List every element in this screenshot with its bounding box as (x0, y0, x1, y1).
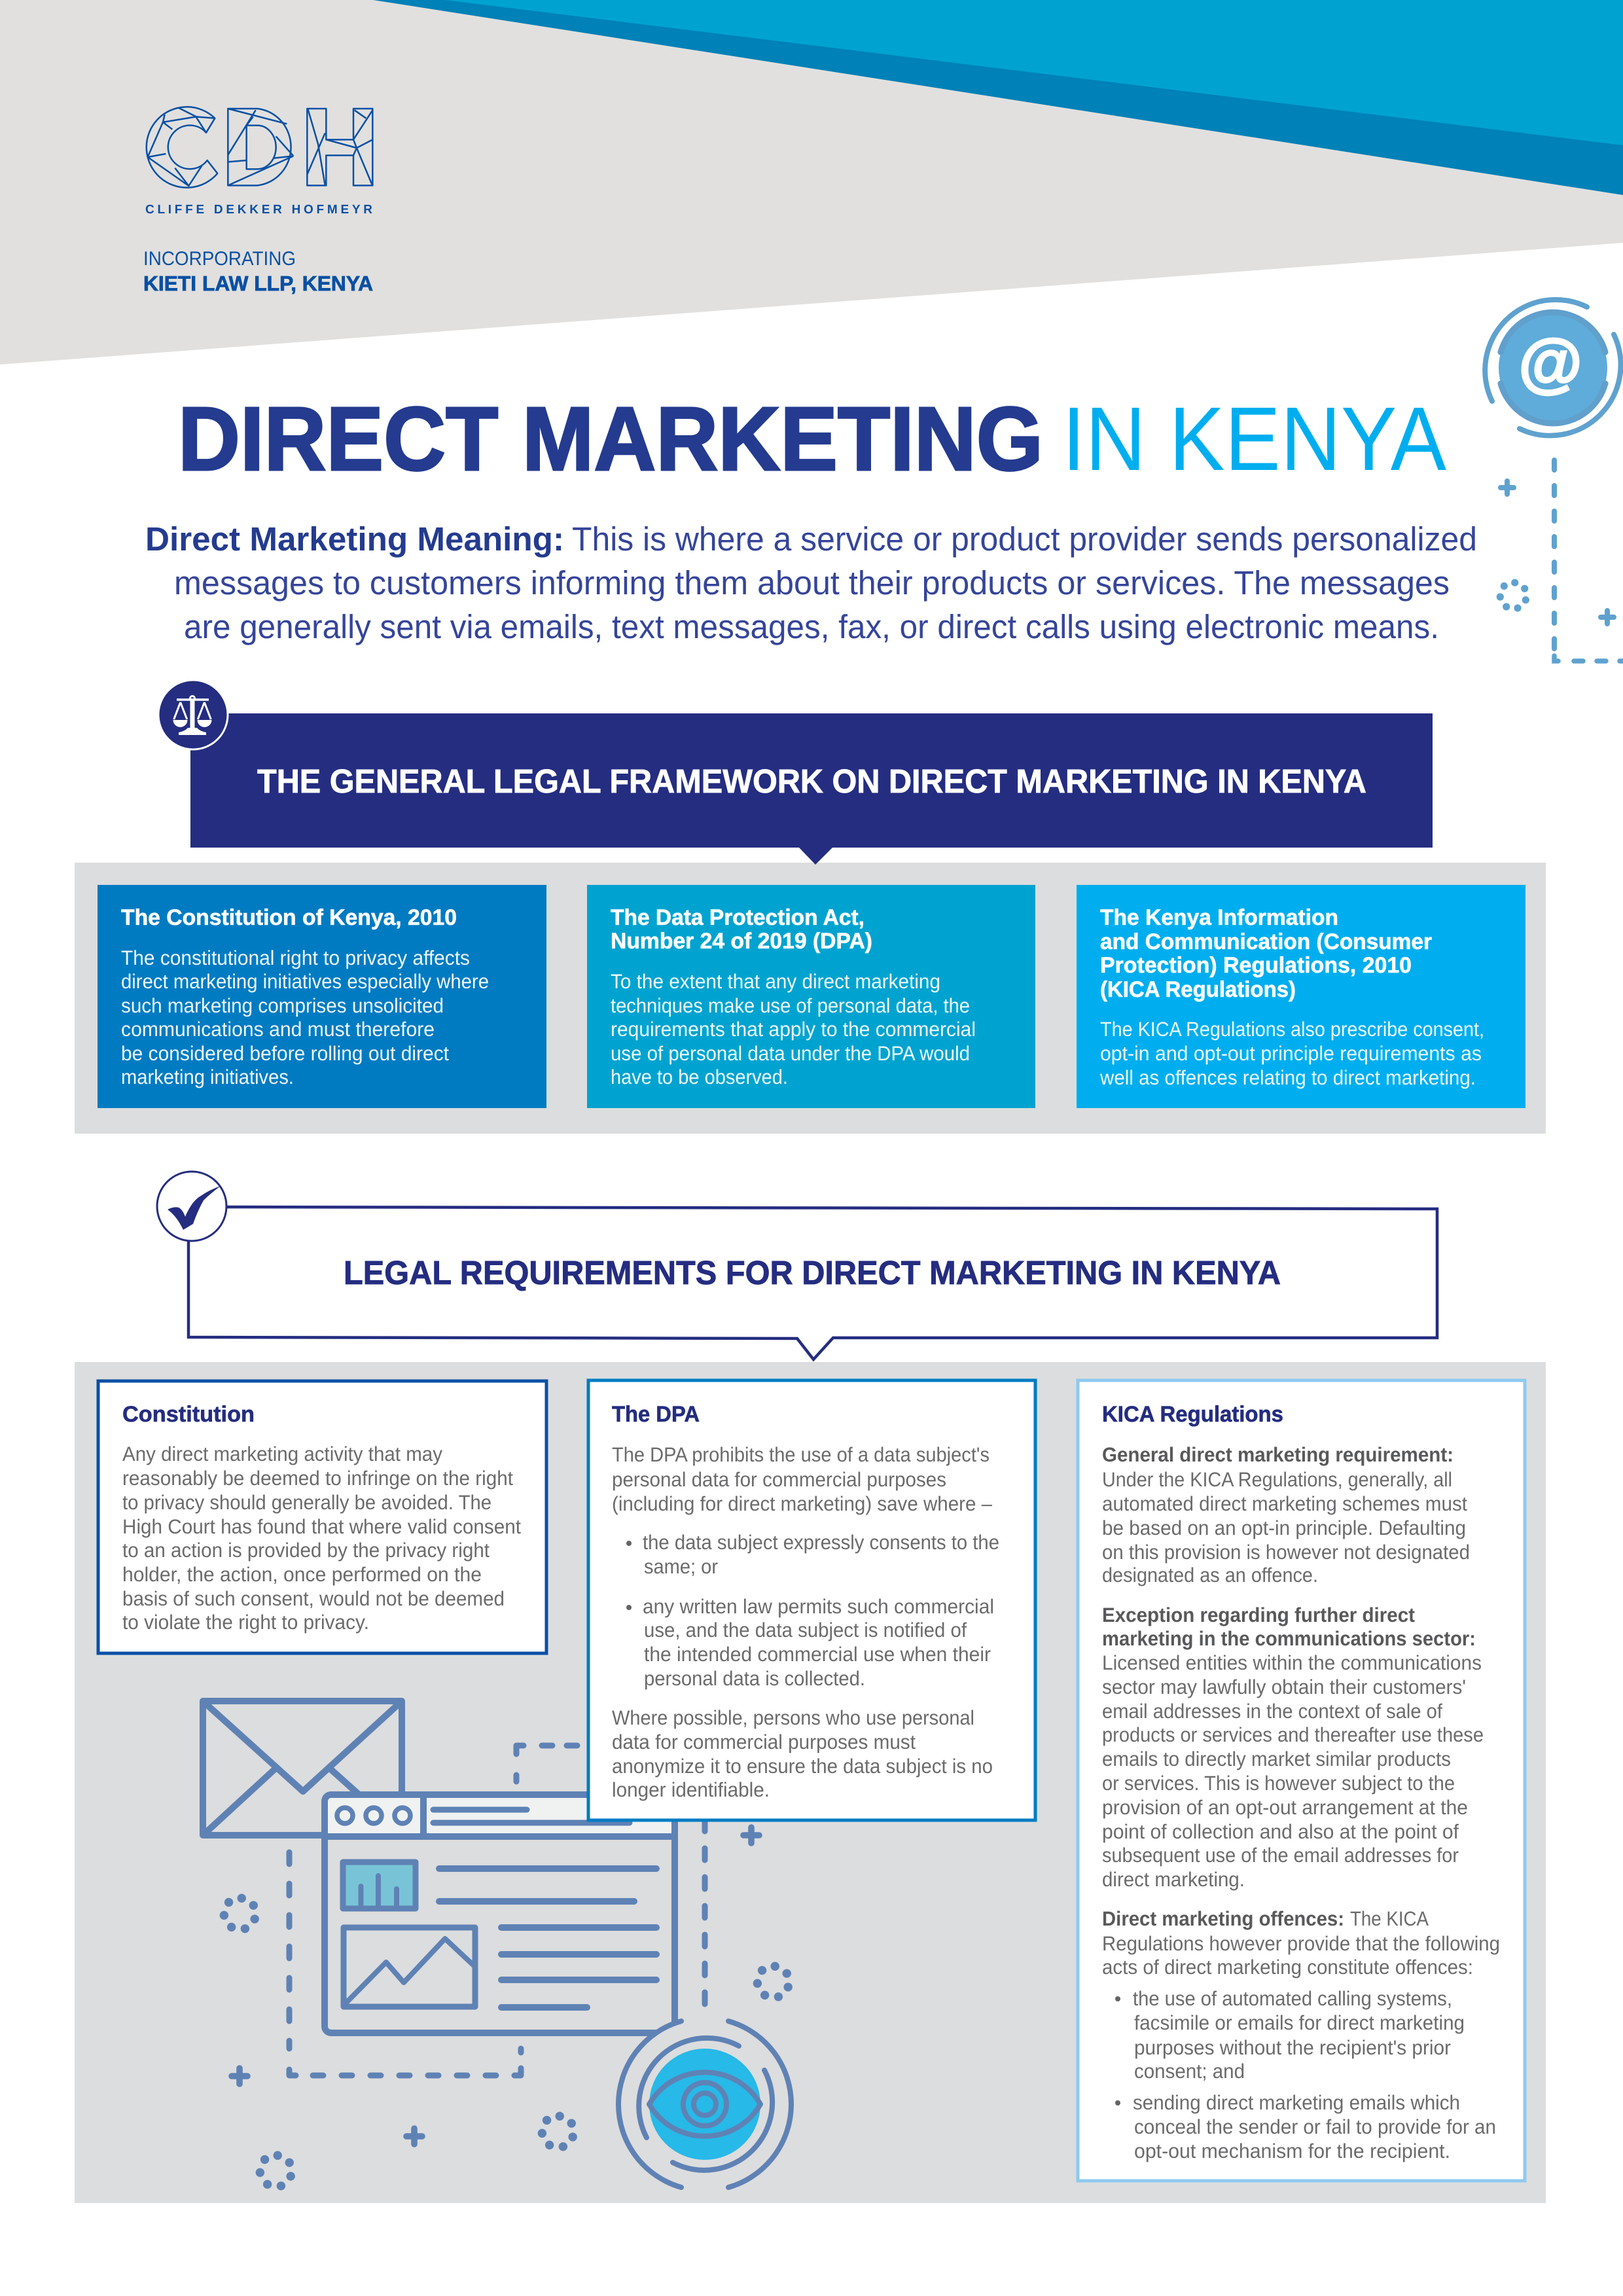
box: KICA Regulations requirement: opt-out mechanism for the recipient. (1134, 2140, 1450, 2162)
illustration: envelope, browser window, eye (203, 1701, 793, 2192)
heading banner: legal requirements: LEGAL REQUIREMENTS FOR DIRECT MARKETING IN KENYA (344, 1254, 1281, 1291)
heading banner: general legal framework: THE GENERAL LEGAL FRAMEWORK ON DIRECT MARKETING IN KENYA (257, 762, 1366, 800)
box: Constitution requirement (98, 1381, 546, 1653)
box: DPA requirement: The DPA (612, 1402, 700, 1427)
envelope (203, 1701, 402, 1835)
title: DIRECT MARKETING (178, 389, 1043, 490)
box: KICA Regulations requirement: consent; and (1134, 2060, 1245, 2083)
heading banner: legal requirements (188, 1207, 1437, 1359)
card: Data Protection Act: To the extent that any direct marketing (611, 970, 940, 993)
icon: at sign in rings with dashed connector (1485, 300, 1623, 661)
card: Constitution of Kenya: marketing initiatives. (121, 1066, 294, 1088)
box: DPA requirement: same; or (644, 1555, 718, 1578)
icon: check mark in circle (157, 1172, 226, 1241)
box: KICA Regulations requirement: Exception regarding further direct (1102, 1604, 1415, 1626)
box: Constitution requirement: reasonably be deemed to infringe on the right (122, 1467, 513, 1490)
box: KICA Regulations requirement: products or services and thereafter use these (1102, 1723, 1484, 1746)
box: KICA Regulations requirement: subsequent use of the email addresses for (1102, 1844, 1459, 1867)
browser window (325, 1795, 675, 2033)
box: DPA requirement: any written law permits such commercial (643, 1595, 994, 1618)
card: Data Protection Act: have to be observed. (611, 1066, 788, 1088)
panel: general framework background (75, 863, 1546, 1134)
card: Constitution of Kenya: direct marketing initiatives especially where (121, 970, 489, 993)
intro text block: messages to customers informing them about their products or services. The messages (174, 564, 1450, 601)
title: IN KENYA (1062, 389, 1446, 490)
box: Constitution requirement: to privacy should generally be avoided. The (122, 1491, 491, 1514)
card: KICA Regulations summary: (KICA Regulations) (1100, 977, 1296, 1002)
box: KICA Regulations requirement: conceal the sender or fail to provide for an (1134, 2115, 1496, 2138)
box: KICA Regulations requirement: automated direct marketing schemes must (1102, 1492, 1467, 1515)
box: KICA Regulations requirement: facsimile or emails for direct marketing (1134, 2011, 1465, 2034)
box: DPA requirement: Where possible, persons who use personal (612, 1706, 974, 1729)
card: KICA Regulations summary: The KICA Regulations also prescribe consent, (1100, 1018, 1484, 1041)
box: Constitution requirement: Constitution (122, 1402, 255, 1427)
header accent: teal band (445, 0, 1623, 145)
box: KICA Regulations requirement: acts of direct marketing constitute offences: (1102, 1956, 1473, 1979)
box: KICA Regulations requirement: marketing in the communications sector: (1102, 1627, 1476, 1650)
intro text block (145, 520, 1477, 645)
card: Data Protection Act: requirements that apply to the commercial (611, 1018, 976, 1041)
box: Constitution requirement: High Court has found that where valid consent (122, 1515, 521, 1538)
card: Constitution of Kenya: be considered before rolling out direct (121, 1042, 449, 1065)
card: KICA Regulations summary: opt-in and opt-out principle requirements as (1100, 1042, 1482, 1065)
box: KICA Regulations requirement: or services. This is however subject to the (1102, 1772, 1455, 1795)
box: KICA Regulations requirement: sending direct marketing emails which (1133, 2091, 1460, 2114)
box: Constitution requirement: to violate the right to privacy. (122, 1611, 369, 1634)
logo mark: faceted CDH letters (147, 107, 372, 188)
box: KICA Regulations requirement: KICA Regulations (1102, 1402, 1283, 1427)
box: DPA requirement: anonymize it to ensure the data subject is no (612, 1755, 993, 1778)
card: Data Protection Act: Number 24 of 2019 (DPA) (611, 929, 872, 954)
box: KICA Regulations requirement: point of collection and also at the point of (1102, 1820, 1459, 1843)
box: Constitution requirement: basis of such consent, would not be deemed (122, 1587, 505, 1610)
intro text block: This is where a service or product provider sends personalized (572, 520, 1477, 558)
card: Constitution of Kenya: communications and must therefore (121, 1018, 435, 1041)
box: KICA Regulations requirement: purposes without the recipient's prior (1134, 2036, 1451, 2059)
logo: CDH Cliffe Dekker Hofmeyr (143, 107, 373, 295)
logo: Kieti Law line: KIETI LAW LLP, KENYA (143, 272, 373, 295)
card: Data Protection Act: use of personal data under the DPA would (611, 1042, 970, 1065)
dashed connectors (289, 1746, 705, 2075)
header background: grey wedge (0, 0, 1623, 365)
box: KICA Regulations requirement: Direct marketing offences: (1102, 1907, 1344, 1930)
box: DPA requirement: personal data for commercial purposes (612, 1468, 946, 1491)
card: Data Protection Act (587, 885, 1035, 1108)
heading banner: general legal framework (190, 713, 1433, 865)
box: KICA Regulations requirement: designated as an offence. (1102, 1564, 1318, 1587)
box: DPA requirement: the data subject expressly consents to the (643, 1531, 999, 1554)
box: KICA Regulations requirement: direct marketing. (1102, 1868, 1245, 1891)
logo: incorporating line: INCORPORATING (143, 248, 296, 270)
box: DPA requirement: data for commercial purposes must (612, 1731, 916, 1753)
box: KICA Regulations requirement: General direct marketing requirement: (1102, 1443, 1454, 1466)
box: KICA Regulations requirement: be based on an opt-in principle. Defaulting (1102, 1516, 1466, 1539)
box: Constitution requirement: to an action is provided by the privacy right (122, 1539, 490, 1562)
card: Constitution of Kenya: The constitutional right to privacy affects (121, 946, 470, 969)
box: KICA Regulations requirement: provision of an opt-out arrangement at the (1102, 1796, 1468, 1819)
box: KICA Regulations requirement: on this provision is however not designated (1102, 1541, 1470, 1564)
logo wordmark: CLIFFE DEKKER HOFMEYR (145, 203, 372, 217)
intro text block: are generally sent via emails, text messages, fax, or direct calls using electronic means. (184, 608, 1439, 645)
box: KICA Regulations requirement: Under the KICA Regulations, generally, all (1102, 1468, 1452, 1491)
card: Constitution of Kenya (98, 885, 546, 1108)
box: DPA requirement: (including for direct marketing) save where – (612, 1492, 993, 1515)
panel: legal requirements background (75, 1362, 1546, 2203)
box: KICA Regulations requirement: the use of automated calling systems, (1133, 1987, 1452, 2010)
box: DPA requirement: personal data is collected. (644, 1667, 865, 1690)
decorative dot rings and plus signs (220, 1827, 793, 2191)
box: KICA Regulations requirement: The KICA (1350, 1907, 1429, 1930)
card: KICA Regulations summary: well as offences relating to direct marketing. (1099, 1066, 1476, 1089)
header accent: dark blue band (373, 0, 1623, 195)
box: KICA Regulations requirement: emails to directly market similar products (1102, 1748, 1451, 1770)
box: Constitution requirement: holder, the action, once performed on the (122, 1563, 482, 1586)
box: DPA requirement: the intended commercial use when their (644, 1643, 991, 1666)
card: KICA Regulations summary (1077, 885, 1525, 1108)
card: Constitution of Kenya: such marketing comprises unsolicited (121, 994, 444, 1017)
box: KICA Regulations requirement: Licensed entities within the communications (1102, 1651, 1482, 1674)
box: DPA requirement: longer identifiable. (612, 1778, 770, 1801)
box: DPA requirement: use, and the data subject is notified of (644, 1619, 967, 1641)
card: KICA Regulations summary: Protection) Regulations, 2010 (1100, 953, 1412, 978)
box: KICA Regulations requirement: email addresses in the context of sale of (1102, 1700, 1442, 1723)
card: KICA Regulations summary: and Communication (Consumer (1100, 929, 1432, 954)
card: Constitution of Kenya: The Constitution of Kenya, 2010 (121, 905, 457, 930)
card: Data Protection Act: techniques make use of personal data, the (611, 994, 970, 1017)
icon: at sign in rings with dashed connector: @ (1518, 326, 1582, 399)
box: KICA Regulations requirement (1078, 1380, 1525, 2181)
intro text block: Direct Marketing Meaning: (145, 520, 564, 558)
box: DPA requirement: The DPA prohibits the use of a data subject's (612, 1443, 990, 1466)
box: KICA Regulations requirement: sector may lawfully obtain their customers' (1102, 1676, 1466, 1698)
eye icon with rings (617, 2017, 793, 2192)
box: KICA Regulations requirement: Regulations however provide that the following (1102, 1932, 1500, 1955)
card: KICA Regulations summary: The Kenya Information (1100, 905, 1338, 930)
box: DPA requirement (588, 1380, 1035, 1820)
box: Constitution requirement: Any direct marketing activity that may (122, 1443, 442, 1465)
card: Data Protection Act: The Data Protection Act, (611, 905, 865, 930)
icon: scales of justice (158, 680, 228, 749)
